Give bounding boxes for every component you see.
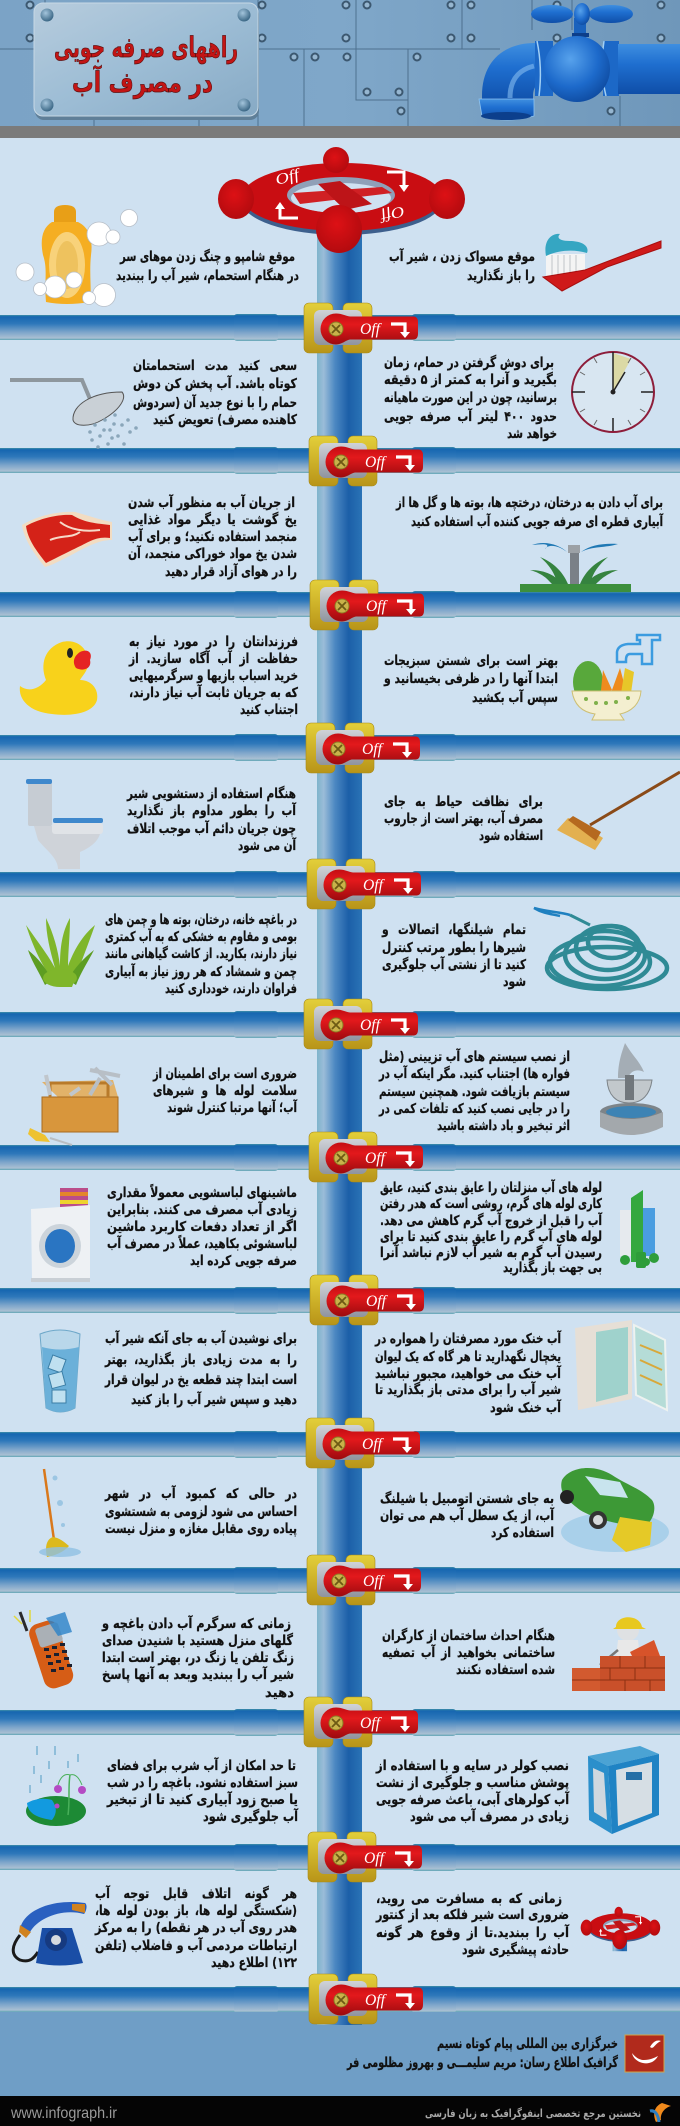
text: five minute shower tip: خواهد شد	[507, 426, 557, 442]
text: pipe insulation tip	[380, 1179, 602, 1276]
text: cooler tip: آب کولرهای آبی، باعث صرفه جویی	[376, 1791, 569, 1808]
text: report leaks tip: هر گونه اتلاف قابل توجه آب	[95, 1885, 297, 1902]
valve 5	[307, 859, 421, 909]
text: travelling tip: حادثه پیشگیری شود	[462, 1941, 569, 1958]
vertical main pipe	[317, 232, 362, 2025]
icon: fountain	[600, 1043, 663, 1135]
text: hose tip: تمام شیلنگها، اتصالات و	[381, 921, 526, 938]
text: garden watering tip: سبز استفاده نشود. باغچه را در شب	[107, 1775, 298, 1791]
text: credits: خبرگزاری بین المللی پیام کوتاه نسیم	[437, 2035, 618, 2052]
text: drinking water tip: را به مدت زیادی باز بگذارید، بهتر	[104, 1351, 297, 1368]
text: tools tip: سلامت لوله ها و شیرهای	[153, 1083, 297, 1099]
icon: glass of water	[40, 1330, 80, 1412]
icon: mobile phone	[14, 1610, 76, 1691]
icon: tap and vegetable bowl	[572, 635, 660, 720]
text: fountain tip: اثر تبخیر و باد داشته باشید	[437, 1118, 570, 1134]
icon: small valve wheel	[581, 1907, 660, 1951]
icon: rubber duck	[20, 641, 97, 715]
text: pipe insulation tip: آب را قبل از خروج آب گرم کاهش می دهد.	[380, 1212, 602, 1229]
text: children tip: حفاظت از آب آگاه سازید. از	[128, 650, 298, 667]
icon: washing machine	[31, 1188, 90, 1282]
valve 6: Off	[360, 1017, 382, 1034]
icon: garden hose	[534, 908, 667, 989]
text: vegetables tip	[383, 653, 558, 706]
text: five minute shower tip: برسانید، چون در این صورت ماهیانه	[384, 390, 557, 406]
icon: builder with bricks	[572, 1617, 665, 1691]
text: cooler tip	[375, 1758, 569, 1825]
valve wheel: Off	[377, 202, 406, 225]
valve 12: Off	[364, 1850, 386, 1867]
text: sidewalk mop tip	[104, 1485, 297, 1537]
text: toilet tip: آن می شود	[238, 837, 296, 854]
valve 2: Off	[365, 454, 387, 471]
footer url: www.infograph.ir	[10, 2105, 118, 2122]
text: thawing meat tip: از جریان آب به منظور آب شدن	[128, 494, 295, 511]
text: toothbrush tip: موقع مسواک زدن ، شیر آب	[389, 248, 535, 265]
text: shampoo tip	[116, 248, 299, 284]
text: vegetables tip: سپس آب بکشید	[472, 689, 558, 706]
valve 10: Off	[363, 1573, 385, 1590]
text: drinking water tip: برای نوشیدن آب به جای آنکه شیر آب	[105, 1330, 297, 1347]
valve 3: Off	[366, 598, 388, 615]
text: broom tip: مصرف آب، بهتر است از جاروب	[384, 810, 543, 827]
text: native plants tip: چمن و شمشاد که هر روز نیاز به آبیاری	[105, 963, 297, 980]
icon: open fridge	[575, 1320, 667, 1410]
title text	[54, 31, 238, 99]
text: native plants tip: فراوان دارند، خودداری کنید	[165, 981, 297, 997]
text: fountain tip: فواره ها) اجتناب کنید. مگر اینکه آب در	[378, 1065, 570, 1082]
text: fridge tip: آب خنک شود	[490, 1399, 561, 1416]
text: hose tip: کنید تا از نشتی آب جلوگیری	[382, 956, 526, 973]
valve 4: Off	[362, 741, 384, 758]
valve 13: Off	[365, 1992, 387, 2009]
icon: grass plant	[26, 918, 95, 987]
text: thawing meat tip: را در هوای آزاد قرار دهید	[165, 563, 297, 580]
text: five minute shower tip: بگیرید و آنرا به کمتر از ۵ دقیقه	[384, 371, 557, 388]
text: garden watering tip: آب جلوگیری شود	[203, 1808, 298, 1825]
valve 4	[306, 723, 420, 773]
icon: footer logo	[650, 2103, 671, 2122]
icon: toolbox	[28, 1068, 120, 1145]
text: fridge tip	[374, 1330, 561, 1416]
valve 10	[307, 1555, 421, 1605]
text: fountain tip: را در جایی نصب کنید که تلفات کمی در	[378, 1101, 570, 1117]
text: children tip: خرید اسباب بازیها و سرگرمیهایی	[129, 667, 298, 684]
text: washing machine tip: صرفه جویی کرده اید	[190, 1253, 297, 1269]
valve 8: Off	[366, 1293, 388, 1310]
text: fridge tip: شیر آب را برای مدتی باز بگذارید تا	[375, 1381, 561, 1398]
text: five minute shower tip: حدود ۴۰۰ لیتر آب صرفه جویی	[384, 408, 557, 425]
text: builders tip: ساختمانی بخواهید از آب تصفیه	[382, 1644, 555, 1661]
text: travelling tip: ضروری است شیر فلکه بعد از کنتور	[375, 1907, 569, 1923]
text: native plants tip	[105, 912, 297, 997]
all tip text	[94, 248, 663, 2071]
header metal panel background	[0, 0, 680, 126]
text: phone tip: زمانی که سرگرم آب دادن باغچه و	[101, 1615, 291, 1632]
text: sidewalk mop tip: پیاده روی مقابل مغازه و منزل نیست	[105, 1521, 297, 1537]
text: thawing meat tip: شدن یخ مواد خوراکی منجمد، آن	[128, 545, 297, 562]
text: pipe insulation tip: کاری لوله های گرم، روشی است که هدر رفتن	[380, 1195, 602, 1212]
text: short shower tip: حمام را با نوع جدید آن (سردوش	[133, 394, 297, 411]
text: garden watering tip: تا حد امکان از آب شرب برای فضای	[107, 1757, 296, 1774]
text: report leaks tip	[94, 1885, 298, 1971]
text: drinking water tip: دهید و سپس شیر آب را باز کنید	[131, 1391, 297, 1408]
text: drinking water tip	[104, 1330, 297, 1408]
text: washing machine tip: اگر از تعداد دفعات کاربرد ماشین	[107, 1218, 297, 1235]
text: travelling tip	[375, 1891, 569, 1958]
valve 6	[304, 999, 418, 1049]
footer bar	[0, 2096, 680, 2126]
valve 2	[309, 436, 423, 486]
valve 1	[304, 303, 418, 353]
text: children tip: فرزندانتان را در مورد نیاز به	[129, 634, 298, 650]
text: garden watering tip: یا صبح زود آبیاری کنید تا از تبخیر	[106, 1791, 298, 1808]
text: drinking water tip: است ابتدا چند قطعه یخ در لیوان قرار	[104, 1372, 297, 1388]
text: toilet tip: هنگام استفاده از دستشویی شیر	[126, 785, 296, 802]
text: travelling tip: زمانی که به مسافرت می روید،	[376, 1891, 562, 1907]
icon: mop	[39, 1469, 81, 1557]
icon: rotary telephone	[13, 1902, 87, 1966]
icon: green car	[560, 1468, 669, 1552]
text: five minute shower tip: برای دوش گرفتن در حمام، زمان	[384, 354, 554, 371]
text: fridge tip: یخچال نگهدارید تا هر گاه که یک لیوان	[375, 1348, 561, 1365]
logo: Nasim news agency	[625, 2035, 664, 2072]
text: cooler tip: زیادی در مصرف آب می شود	[410, 1808, 569, 1825]
valve 9	[306, 1418, 420, 1468]
text: builders tip	[382, 1627, 555, 1678]
icon: water pipes	[620, 1190, 659, 1268]
valve 7: Off	[365, 1150, 387, 1167]
text: builders tip: شده استفاده نکنند	[456, 1662, 555, 1678]
text: pipe insulation tip: بی جهت باز بگذارید	[503, 1259, 602, 1276]
text: builders tip: هنگام احداث ساختمان از کارگران	[382, 1627, 555, 1644]
text: report leaks tip: ۱۲۲) اطلاع دهید	[211, 1955, 298, 1971]
valve wheel	[218, 147, 465, 253]
text: thawing meat tip: یخ گوشت یا دیگر مواد غذایی	[128, 511, 297, 528]
text: tools tip: ضروری است برای اطمینان از	[152, 1066, 297, 1082]
text: washing machine tip: زیادی آب مصرف می کنند. بنابراین	[107, 1201, 297, 1218]
icon: rain and flower	[26, 1746, 86, 1826]
text: broom tip: استفاده شود	[479, 828, 543, 844]
text: fridge tip: آب خنک مورد مصرفتان را همواره در	[374, 1330, 561, 1347]
text: pipe insulation tip: لوله های آب گرم را عایق بندی کنید تا برای	[380, 1228, 602, 1245]
text: short shower tip: کاهنده مصرف) تعویض کنید	[153, 412, 297, 428]
title text: در مصرف آب	[72, 65, 213, 99]
icon: evaporative cooler	[588, 1746, 659, 1834]
title plate	[34, 3, 259, 120]
horizontal pipes	[0, 314, 680, 2013]
text: short shower tip: سعی کنید مدت استحمامتان	[133, 358, 297, 374]
text: native plants tip: در باغچه خانه، درختان، بوته ها و چمن های	[105, 912, 297, 928]
text: toilet tip	[126, 785, 296, 854]
text: native plants tip: بومی و مقاوم به خشکی که به آب کمتری	[105, 928, 297, 945]
valve 3	[310, 580, 424, 630]
text: fountain tip: از نصب سیستم های آب تزیینی (مثل	[379, 1048, 570, 1065]
text: report leaks tip: (شکستگی لوله ها، باز بودن لوله ها،	[95, 1902, 297, 1919]
icon: meat steak	[22, 512, 112, 567]
text: vegetables tip: ابتدا آنها را در ظرفی بخیسانید و	[383, 670, 558, 687]
text: sidewalk mop tip: در حالی که کمبود آب در شهر	[104, 1485, 297, 1502]
text: tools tip	[152, 1066, 297, 1116]
text: fountain tip	[378, 1048, 570, 1134]
icon: garden sprinkler	[520, 543, 631, 592]
text: short shower tip	[133, 358, 297, 428]
text: thawing meat tip: منجمد استفاده نکنید؛ و برای آب	[128, 528, 297, 545]
text: shampoo tip: در هنگام استحمام، شیر آب را ببندید	[116, 267, 299, 284]
text: phone tip: گلهای منزل هستید با شنیدن صدای	[102, 1632, 293, 1649]
text: washing machine tip	[107, 1183, 297, 1269]
text: drip irrigation tip	[395, 494, 663, 530]
text: fridge tip: آب خنک می خواهید، مجبور نباشید	[375, 1365, 561, 1382]
text: shampoo tip: موقع شامپو و چنگ زدن موهای سر	[119, 248, 295, 265]
icon: toilet	[26, 779, 103, 869]
text: car wash tip: آب، از یک سطل آب هم می توان	[380, 1507, 554, 1524]
text: thawing meat tip	[128, 494, 297, 580]
text: children tip: اجتناب کنید	[240, 702, 298, 718]
text: pipe insulation tip: رسیدن آب گرم به شیر آب لازم نباشد آنرا	[380, 1244, 602, 1261]
valve 7	[309, 1132, 423, 1182]
text: short shower tip: کوتاه باشد. آب پخش کن دوش	[133, 375, 297, 392]
text: children tip: که به جریان ثابت آب نیاز دارند،	[129, 684, 298, 701]
icon: shower head	[10, 380, 138, 449]
text: phone tip: شیر آب را ببندید وبعد به آنها پاسخ	[102, 1666, 294, 1683]
valve 5: Off	[363, 877, 385, 894]
text: phone tip	[101, 1615, 294, 1701]
text: vegetables tip: بهتر است برای شستن سبزیجات	[384, 653, 558, 669]
valve 1: Off	[360, 321, 382, 338]
text: washing machine tip: ماشینهای لباسشویی معمولاً مقداری	[107, 1183, 297, 1201]
valve 13	[309, 1974, 423, 2024]
icon: broom	[557, 772, 680, 850]
text: car wash tip: به جای شستن اتومبیل با شیلنگ	[380, 1490, 554, 1507]
text: sidewalk mop tip: احساس می شود لزومی به شستشوی	[105, 1504, 297, 1520]
title text: راههای صرفه جویی	[54, 31, 238, 64]
text: hose tip: شود	[503, 974, 526, 990]
text: report leaks tip: هدر روی آب در هر نقطه) را به مرکز	[94, 1919, 297, 1936]
text: fountain tip: سیستم بازیافت شود. همچنین سیستم	[379, 1084, 570, 1100]
text: car wash tip: استفاده کرد	[491, 1525, 554, 1541]
valve 9: Off	[362, 1436, 384, 1453]
text: toothbrush tip	[389, 248, 535, 284]
valve 11: Off	[360, 1715, 382, 1732]
text: travelling tip: آب را ببندید.تا از وقوع هر گونه	[376, 1924, 569, 1941]
text: native plants tip: نیاز دارند، بکارید. از کاشت گیاهانی مانند	[105, 945, 297, 962]
text: phone tip: زنگ تلفن یا زنگ در، بهتر است ابتدا	[102, 1649, 294, 1666]
text: children tip	[128, 634, 298, 718]
text: broom tip	[384, 794, 543, 844]
valve 12	[308, 1832, 422, 1882]
icon: blue faucet	[479, 3, 680, 120]
text: washing machine tip: لباسشوئی بکاهید، عملاً در مصرف آب	[107, 1234, 297, 1252]
valve 11	[304, 1697, 418, 1747]
icon: toothbrush	[543, 234, 661, 291]
text: cooler tip: پوشش مناسب و جلوگیری از نشت	[376, 1774, 569, 1791]
text: toilet tip: آب را بطور مداوم باز نگذارید	[127, 802, 296, 819]
text: cooler tip: نصب کولر در سایه و با استفاده از	[375, 1758, 569, 1774]
text: hose tip	[381, 921, 526, 990]
icon: shampoo bottle	[16, 205, 138, 306]
valve wheel: Off	[274, 166, 303, 189]
text: pipe insulation tip: لوله های آب منزلتان را عایق بندی کنید، عایق	[380, 1179, 602, 1196]
text: credits	[346, 2035, 618, 2071]
text: five minute shower tip	[384, 354, 557, 442]
text: car wash tip	[380, 1490, 554, 1541]
valve 8	[310, 1275, 424, 1325]
grey header band	[0, 126, 680, 138]
text: hose tip: شیرها را بطور مرتب کنترل	[382, 940, 526, 956]
text: toilet tip: چون جریان دائم آب موجب اتلاف	[127, 820, 296, 837]
text: report leaks tip: ارتباطات مردمی آب و فاضلاب (تلفن	[95, 1937, 297, 1954]
text: broom tip: برای نظافت حیاط به جای	[384, 794, 543, 810]
bottom credits band	[0, 2012, 680, 2096]
text: garden watering tip	[106, 1757, 298, 1825]
text: toothbrush tip: را باز نگذارید	[467, 267, 535, 284]
text: tools tip: آب؛ آنها مرتبا کنترل شوند	[167, 1099, 297, 1116]
text: phone tip: دهید	[265, 1685, 294, 1701]
icon: clock	[572, 352, 654, 432]
